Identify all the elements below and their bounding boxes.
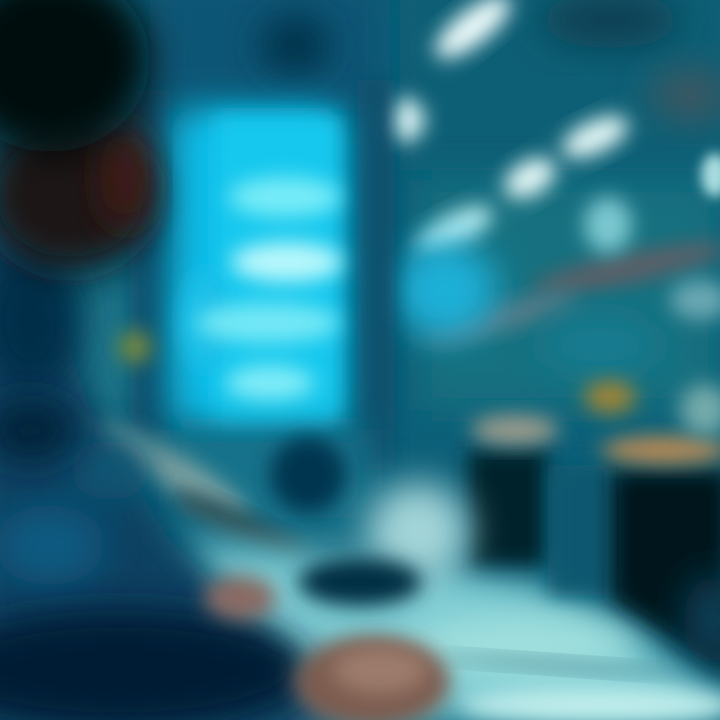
person: neck and face bbox=[0, 120, 155, 270]
dark column bbox=[358, 80, 394, 470]
white globe bbox=[366, 482, 470, 582]
dark tables on right bbox=[468, 450, 720, 675]
floor surface bbox=[180, 540, 720, 720]
orange table edge bbox=[471, 381, 720, 464]
microphone ball bbox=[270, 437, 346, 513]
bright screen bbox=[172, 108, 343, 430]
cyan glow beside column bbox=[393, 242, 497, 338]
hand right bbox=[294, 636, 450, 720]
screen text row 4 bbox=[226, 365, 314, 401]
screen text row 1 bbox=[229, 177, 341, 217]
dark stand bbox=[298, 558, 422, 606]
person: shoulder and body bbox=[0, 200, 350, 720]
screen text row 2 bbox=[231, 242, 343, 282]
light fixtures bbox=[381, 0, 720, 264]
screen text row 3 bbox=[196, 303, 340, 343]
hand left bbox=[204, 576, 276, 620]
background: laboratory wall bbox=[60, 0, 720, 440]
person: hair bbox=[0, 0, 150, 152]
person: cheek bbox=[101, 120, 149, 230]
desk and left equipment bbox=[83, 331, 370, 568]
